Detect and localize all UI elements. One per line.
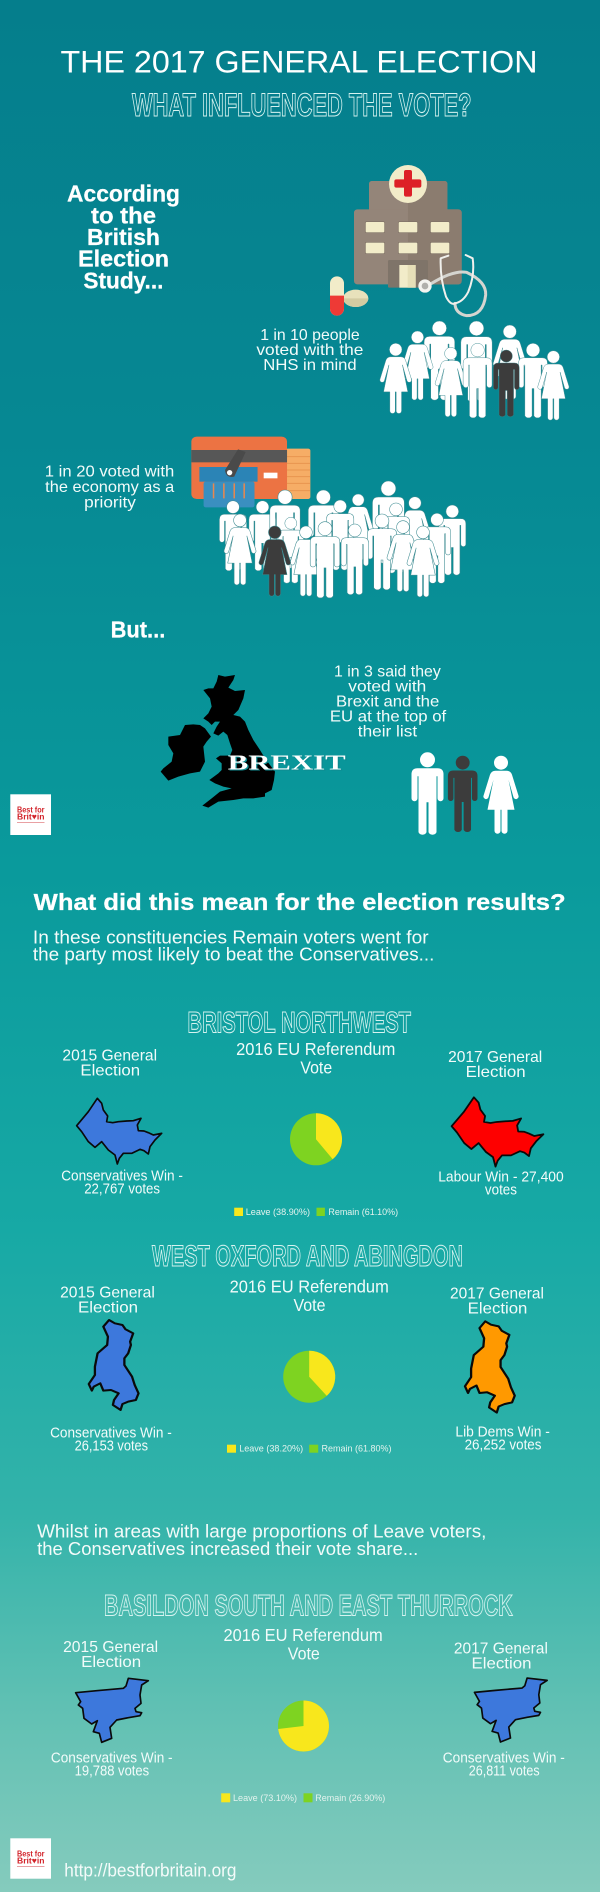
text: Brexit statistic	[330, 664, 447, 741]
map: West Oxford 2015 blue	[89, 1320, 139, 1410]
text: West Oxford 2015 result: Conservatives Win -	[50, 1425, 172, 1441]
label: 2017 General Election	[454, 1641, 548, 1673]
logo: Best for Britain footer: Best for	[17, 1849, 45, 1859]
label: BREXIT	[228, 751, 348, 776]
text: Bristol 2015 result: 22,767 votes	[84, 1182, 160, 1198]
text: economy statistic: the economy as a	[45, 479, 174, 496]
map: Basildon 2017 blue	[474, 1678, 547, 1742]
text: economy statistic: priority	[84, 494, 136, 511]
label: 2016 EU Referendum Vote: Vote	[300, 1057, 332, 1077]
intro text: to the	[91, 202, 156, 228]
legend: West Oxford	[227, 1444, 392, 1455]
heading: election results: What did this mean for the election results?	[34, 889, 566, 915]
pictogram: 1 in 20 people	[219, 481, 466, 598]
heading: Bristol Northwest: BRISTOL NORTHWEST	[188, 1007, 411, 1040]
text: Bristol 2017 result: Labour Win - 27,400	[438, 1170, 564, 1186]
text: West Oxford 2015 result: 26,153 votes	[75, 1438, 148, 1454]
text: Brexit statistic: 1 in 3 said they	[334, 664, 441, 681]
label: 2017 General Election: Election	[472, 1656, 532, 1673]
label: 2015 General Election: 2015 General	[60, 1284, 155, 1301]
pie chart: West Oxford referendum	[283, 1351, 335, 1403]
label: 2017 General Election: 2017 General	[450, 1285, 544, 1302]
map: Bristol 2017 red	[452, 1097, 543, 1167]
label: 2015 General Election: Election	[81, 1654, 141, 1671]
label: 2017 General Election: Election	[468, 1300, 527, 1317]
text: Basildon 2015 result: Conservatives Win -	[51, 1751, 173, 1767]
text: NHS statistic: 1 in 10 people	[260, 327, 360, 344]
text: Bristol 2017 result	[438, 1170, 564, 1199]
label: BREXIT: BREXIT	[228, 751, 347, 775]
label: 2016 EU Referendum Vote: Vote	[294, 1295, 326, 1315]
text: Brexit statistic: Brexit and the	[336, 694, 439, 711]
label: 2015 General Election	[62, 1048, 157, 1080]
logo: Best for Britain	[10, 794, 51, 835]
intro text: Election	[78, 246, 169, 272]
icon: credit card, basket and coins	[191, 437, 310, 507]
text: West Oxford 2017 result: Lib Dems Win -	[455, 1425, 550, 1441]
pie chart: Basildon referendum	[278, 1700, 329, 1752]
text: remain voters intro: the party most likely to beat the Conservatives...	[33, 944, 434, 965]
panel: Bristol Northwest	[61, 1007, 564, 1218]
text: Basildon 2017 result	[443, 1751, 565, 1780]
label: 2015 General Election	[60, 1284, 155, 1316]
text: remain voters intro	[33, 926, 434, 965]
pictogram: 1 in 10 people	[380, 321, 569, 420]
heading: But: But...	[111, 617, 165, 643]
logo: Best for Britain footer	[10, 1838, 51, 1879]
text: Brexit statistic: voted with	[348, 679, 426, 696]
legend: Bristol: Remain (61.10%)	[328, 1207, 398, 1218]
text: Brexit statistic: EU at the top of	[330, 709, 447, 726]
pie chart: Bristol referendum	[290, 1113, 342, 1165]
label: 2015 General Election: Election	[78, 1299, 138, 1316]
intro text: British	[87, 224, 160, 250]
label: 2015 General Election	[63, 1639, 158, 1671]
footer url: http://bestforbritain.org	[64, 1860, 236, 1881]
panel: West Oxford and Abingdon	[50, 1240, 550, 1455]
text: Bristol 2015 result	[61, 1169, 183, 1198]
legend: Bristol	[234, 1207, 398, 1218]
text: NHS statistic: voted with the	[256, 342, 364, 359]
legend: Basildon: Remain (26.90%)	[315, 1793, 385, 1804]
label: 2016 EU Referendum Vote: 2016 EU Referendum	[224, 1625, 383, 1645]
text: leave voters intro: the Conservatives increased their vote share...	[37, 1538, 418, 1559]
title: THE 2017 GENERAL ELECTION	[60, 44, 538, 80]
intro text	[67, 181, 180, 293]
text: Bristol 2017 result: votes	[485, 1183, 517, 1199]
label: 2017 General Election: Election	[466, 1064, 526, 1081]
panel: Basildon South and East Thurrock	[51, 1589, 565, 1804]
text: Basildon 2015 result: 19,788 votes	[75, 1764, 149, 1780]
text: Basildon 2017 result: Conservatives Win -	[443, 1751, 565, 1767]
label: 2017 General Election: 2017 General	[448, 1049, 542, 1066]
text: leave voters intro: Whilst in areas with large proportions of Leave voters,	[37, 1521, 486, 1542]
map: UK and Ireland	[161, 675, 275, 808]
text: NHS statistic	[256, 327, 364, 374]
label: 2016 EU Referendum Vote: 2016 EU Referendum	[230, 1277, 389, 1297]
label: 2016 EU Referendum Vote: Vote	[288, 1644, 320, 1664]
map: West Oxford 2017 orange	[465, 1321, 515, 1413]
text: remain voters intro: In these constituencies Remain voters went for	[33, 926, 429, 947]
text: economy statistic	[45, 464, 174, 511]
label: 2017 General Election: 2017 General	[454, 1641, 548, 1658]
text: Bristol 2015 result: Conservatives Win -	[61, 1169, 183, 1185]
label: 2015 General Election: 2015 General	[62, 1048, 157, 1065]
text: Brexit statistic: their list	[358, 724, 418, 741]
map: Basildon 2015 blue	[76, 1678, 148, 1742]
text: NHS statistic: NHS in mind	[263, 357, 357, 374]
legend: Basildon	[221, 1793, 385, 1804]
legend: Bristol: Leave (38.90%)	[246, 1207, 310, 1218]
legend: West Oxford: Remain (61.80%)	[322, 1444, 392, 1455]
legend: Basildon: Leave (73.10%)	[233, 1793, 297, 1804]
label: BREXIT: BREXIT	[229, 752, 348, 776]
label: 2017 General Election	[448, 1049, 542, 1081]
logo: Best for Britain footer: Brit♥in	[17, 1856, 44, 1866]
legend: West Oxford: Leave (38.20%)	[239, 1444, 303, 1455]
label: 2016 EU Referendum Vote	[224, 1625, 383, 1664]
label: 2016 EU Referendum Vote	[236, 1039, 395, 1077]
label: 2015 General Election: 2015 General	[63, 1639, 158, 1656]
label: 2016 EU Referendum Vote: 2016 EU Referendum	[236, 1039, 395, 1059]
text: West Oxford 2017 result	[455, 1425, 550, 1454]
label: 2017 General Election	[450, 1285, 544, 1317]
logo: Best for Britain: Brit♥in	[17, 812, 44, 822]
icon: hospital with pills and stethoscope	[330, 165, 486, 316]
intro text: Study...	[83, 267, 163, 293]
logo: Best for Britain: Best for	[17, 805, 45, 815]
pictogram: 1 in 3 people	[412, 752, 519, 835]
text: Basildon 2015 result	[51, 1751, 173, 1780]
text: economy statistic: 1 in 20 voted with	[45, 464, 174, 481]
map: Bristol 2015 blue	[77, 1098, 162, 1164]
intro text: According	[67, 181, 180, 207]
text: Basildon 2017 result: 26,811 votes	[469, 1764, 540, 1780]
label: 2015 General Election: Election	[80, 1063, 140, 1080]
text: leave voters intro	[37, 1521, 486, 1559]
label: 2016 EU Referendum Vote	[230, 1277, 389, 1315]
text: West Oxford 2015 result	[50, 1425, 172, 1454]
text: West Oxford 2017 result: 26,252 votes	[465, 1438, 542, 1454]
